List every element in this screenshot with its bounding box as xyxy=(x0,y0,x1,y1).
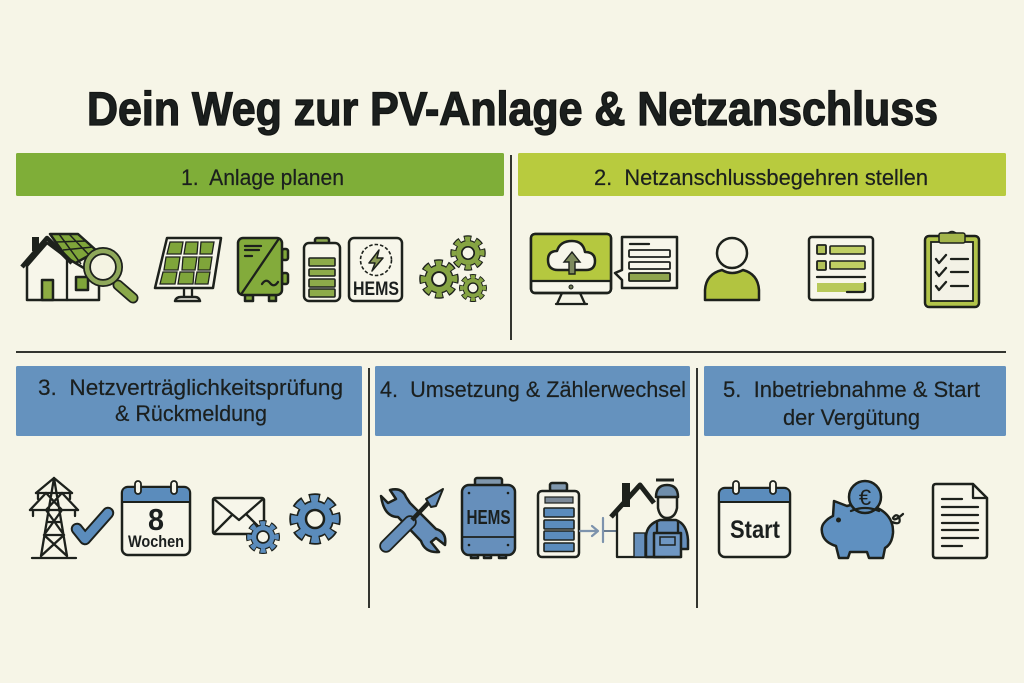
heading bar 1 xyxy=(16,153,504,196)
heading bar 4 xyxy=(375,366,690,436)
icon: calendar 8 Wochen: Wochen xyxy=(128,532,184,551)
icon: clipboard checklist xyxy=(925,232,979,307)
heading bar 2: 2. Netzanschlussbegehren stellen xyxy=(594,165,928,190)
icon: monitor with cloud upload xyxy=(531,234,611,304)
icon: check mark xyxy=(77,513,108,539)
icon: gears xyxy=(420,236,487,302)
heading bar 3: 3. Netzverträglichkeitsprüfung xyxy=(38,375,343,400)
icon: large gear xyxy=(290,494,340,544)
heading bar 2 xyxy=(518,153,1006,196)
icon: person xyxy=(705,238,759,300)
icon: envelope with gear xyxy=(213,498,279,553)
icon: calendar Start xyxy=(719,481,790,557)
icon: form document xyxy=(809,237,873,300)
icon: calendar Start: Start xyxy=(730,516,781,544)
panel: step 3 Netzverträglichkeitsprüfung xyxy=(16,366,362,558)
heading bar 5: der Vergütung xyxy=(783,405,920,430)
title: Dein Weg zur PV-Anlage & Netzanschluss xyxy=(87,82,938,135)
icon: wrench and screwdriver xyxy=(381,489,445,552)
icon: battery xyxy=(304,238,340,301)
arrow: battery to house xyxy=(580,518,617,542)
heading bar 5: 5. Inbetriebnahme & Start xyxy=(723,377,980,402)
icon: HEMS box: HEMS xyxy=(353,279,399,300)
icon: house with solar roof and magnifier xyxy=(22,234,133,300)
icon: calendar 8 Wochen: 8 xyxy=(148,502,164,537)
panel: step 2 Netzanschlussbegehren stellen xyxy=(518,153,1006,307)
heading bar 3 xyxy=(16,366,362,436)
icon: battery with meter xyxy=(538,483,579,557)
icon: piggy bank with euro coin: € xyxy=(859,485,871,510)
icon: calendar 8 Wochen xyxy=(122,481,190,555)
icon: inverter xyxy=(238,238,288,301)
panel: step 5 Inbetriebnahme und Start der Vergütung xyxy=(704,366,1006,558)
icon: HEMS device: HEMS xyxy=(466,507,510,529)
heading bar 3: & Rückmeldung xyxy=(115,401,267,426)
heading bar 1: 1. Anlage planen xyxy=(181,165,344,190)
icon: form speech bubble xyxy=(615,237,677,288)
icon: HEMS box xyxy=(349,238,402,301)
panel: step 1 Anlage planen xyxy=(16,153,504,302)
icon: solar panel xyxy=(155,238,221,301)
heading bar 5 xyxy=(704,366,1006,436)
icon: document xyxy=(933,484,987,558)
icon: house with installer xyxy=(611,480,688,557)
icon: power pylon xyxy=(30,478,78,558)
icon: HEMS device xyxy=(462,478,515,558)
icon: piggy bank with euro coin xyxy=(822,481,903,558)
heading bar 4: 4. Umsetzung & Zählerwechsel xyxy=(380,377,686,402)
panel: step 4 Umsetzung und Zählerwechsel xyxy=(375,366,690,558)
